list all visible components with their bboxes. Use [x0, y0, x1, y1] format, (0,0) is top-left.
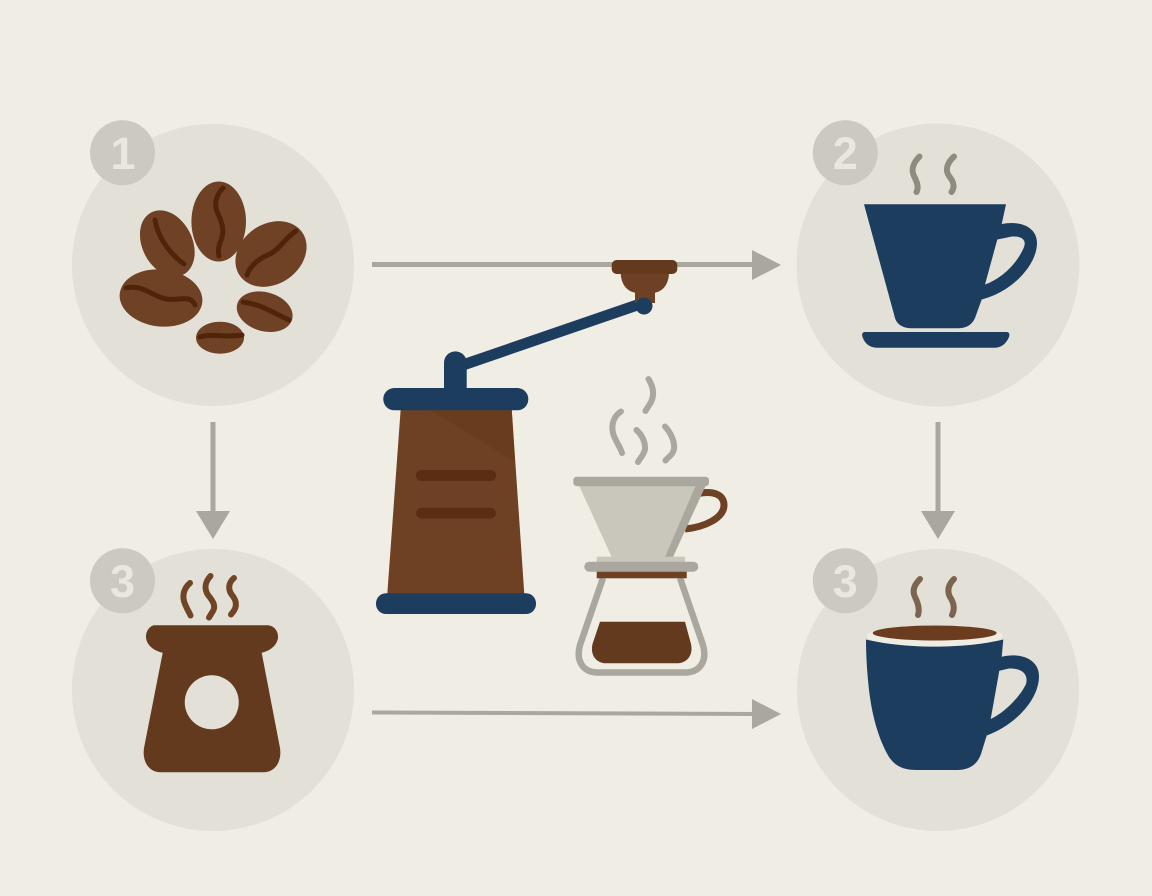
grinder crank arm [460, 303, 643, 366]
panel: mug [797, 548, 1079, 831]
dripper handle [685, 492, 724, 529]
arrow: cup to mug [921, 422, 955, 539]
panel: coffee bag [72, 548, 354, 831]
badge: step 3: 3 [110, 556, 135, 607]
icon: coffee surface [873, 626, 997, 640]
icon: steam [183, 576, 236, 618]
arrow: bag to mug [372, 699, 781, 729]
dripper cone [573, 477, 709, 557]
icon: bag [144, 625, 280, 772]
grinder post and lid [383, 351, 528, 410]
arrow: beans to bag [196, 422, 230, 539]
badge: step 3 [90, 548, 155, 613]
carafe coffee [592, 622, 692, 663]
icon: cup [864, 204, 1037, 328]
badge: step 3: 3 [833, 556, 858, 607]
badge: step 3 [813, 548, 878, 613]
carafe collar [584, 557, 698, 578]
carafe outline [579, 578, 704, 672]
grinder body [387, 409, 524, 594]
icon: pour-over dripper and carafe [573, 379, 724, 672]
icon: beans [117, 182, 319, 354]
badge: step 2: 2 [833, 128, 858, 179]
badge: step 1 [90, 120, 155, 185]
steam [612, 379, 674, 462]
icon: steam [914, 579, 954, 615]
badge: step 1: 1 [110, 128, 136, 179]
icon: coffee grinder [376, 260, 677, 614]
grinder knob [612, 260, 677, 303]
icon: saucer [862, 332, 1009, 348]
icon: mug body [866, 640, 1039, 770]
grinder base [376, 593, 536, 614]
panel: coffee beans [72, 120, 354, 406]
badge: step 2 [813, 120, 878, 185]
icon: cup rim [867, 625, 1003, 647]
icon: steam [913, 156, 954, 192]
arrow: beans to cup [372, 250, 781, 280]
panel: cup with saucer [796, 120, 1080, 406]
